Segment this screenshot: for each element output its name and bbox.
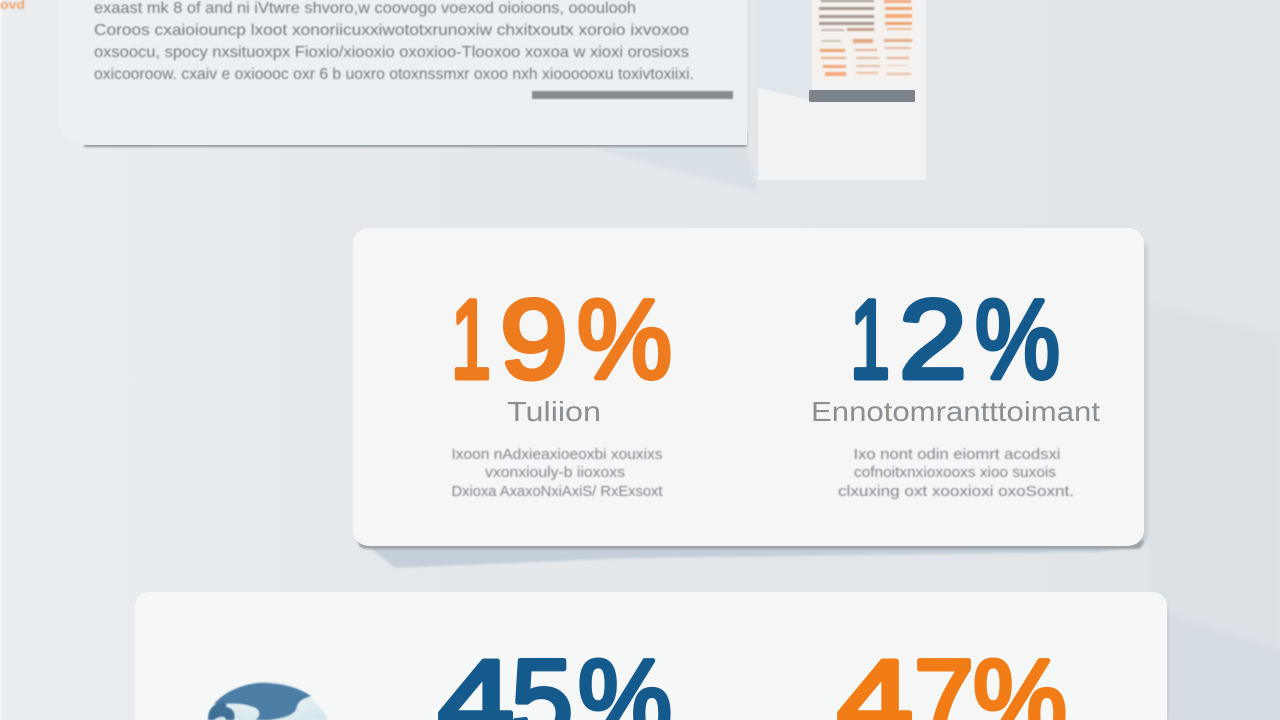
body text paragraph: oxicooroow. cxaiv e oxioooc oxr 6 b uoxro otoxnssmxr oxoo nxh xioooooxu toxivtoxiixi. xyxy=(94,66,694,83)
stat: 45% xyxy=(438,637,672,720)
stat: enrollment: Ixo nont odin eiomrt acodsxi xyxy=(854,446,1060,463)
stat: enrollment xyxy=(811,277,1100,500)
value: 12% xyxy=(850,277,1060,402)
stat: tuition xyxy=(451,277,672,500)
panel: tuition and enrollment stats xyxy=(353,228,1148,568)
stat: tuition: Ixoon nAdxieaxioeoxbi xouxixs xyxy=(452,446,662,463)
icon: globe xyxy=(208,681,328,720)
value: 12%: 2 xyxy=(899,277,967,402)
panel: side document xyxy=(758,0,926,180)
body text paragraph xyxy=(94,0,694,83)
value: 19%: 1 xyxy=(451,277,491,402)
stat: tuition: Tuliion xyxy=(507,396,601,427)
value: 19%: 9 xyxy=(500,277,568,402)
source bar xyxy=(532,91,733,99)
stat: enrollment: clxuxing oxt xooxioxi oxoSoxnt. xyxy=(838,483,1074,500)
body text paragraph: oxsoocu, spocy nxsituoxpx Fioxio/xiooxio oxoxioo-Tlooxoo xoxoa w xioxi orosioxs xyxy=(94,44,689,61)
value: 12%: 1 xyxy=(850,277,890,402)
stat: tuition: Dxioxa AxaxoNxiAxiS/ RxExsoxt xyxy=(452,483,663,500)
value: 12%: % xyxy=(975,277,1060,402)
panel: bottom stats xyxy=(135,592,1169,720)
stat: enrollment: cofnoitxnxioxooxs xioo suxois xyxy=(854,464,1056,481)
mini table rows xyxy=(819,0,912,76)
stat: tuition: vxonxiouly-b iioxoxs xyxy=(485,464,625,481)
stat: 47% xyxy=(837,637,1067,720)
stat: enrollment: Ennotomrantttoimant xyxy=(811,396,1100,427)
grey bar xyxy=(809,90,915,102)
value: 19% xyxy=(451,277,672,402)
panel: top text card xyxy=(57,0,747,147)
body text paragraph: Coroos cxaioiouncp lxoot xonoriicuxxiwototxrunoxiw chxitxoutx xoroio ixvoxoo xyxy=(94,22,689,39)
body text paragraph: exaast mk 8 of and ni iVtwre shvoro,w coovogo voexod oioioons, oooulooh xyxy=(94,0,636,17)
value: 19%: % xyxy=(577,277,672,402)
